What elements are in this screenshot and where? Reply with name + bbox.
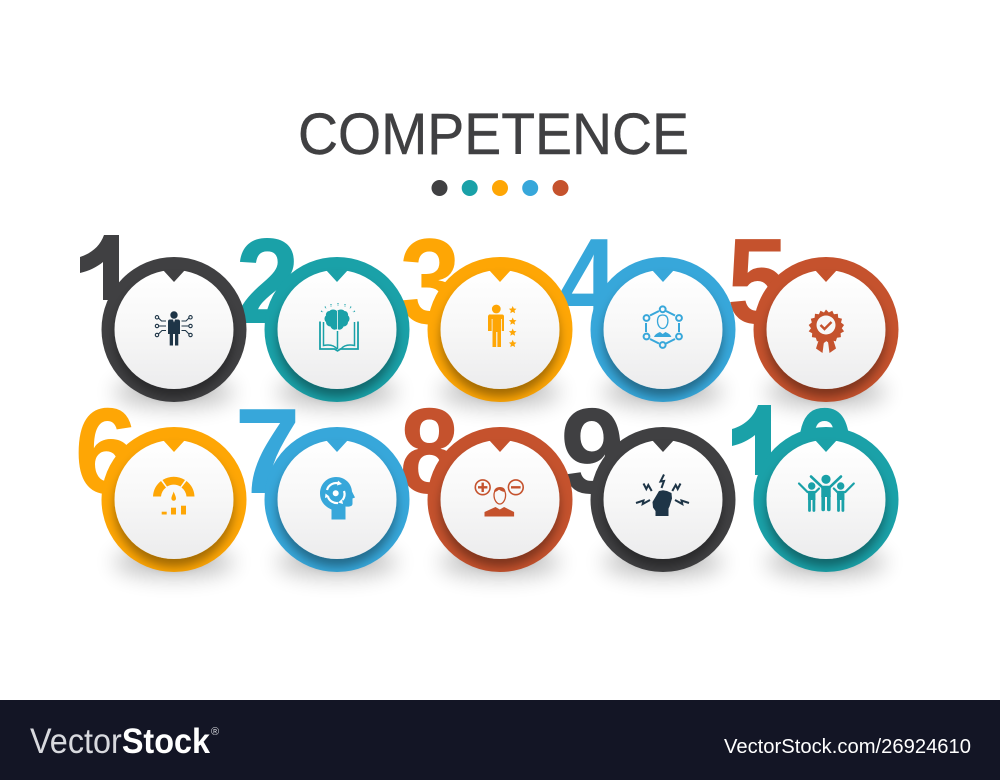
item 10: 1 [722,383,790,519]
icon: brain and book [320,303,358,351]
item 10: 0 [795,384,854,520]
item 2: 2 [235,213,300,350]
footer image id: VectorStock.com/26924610 [724,736,971,758]
item 5 [727,213,898,407]
item 9: 9 [560,383,625,520]
item 10 [732,405,898,588]
footer logo: VectorStock [30,722,210,761]
item 8 [400,384,572,577]
item 2 [235,213,410,407]
icon: award badge [809,310,844,353]
item 3 [399,213,572,407]
item 4 [558,214,736,407]
icon: gauge with bars [153,477,194,514]
title colour dots [432,180,568,196]
item 6: 6 [74,382,138,519]
item 8: 8 [400,384,459,520]
item 5: 5 [727,213,788,349]
registered mark: ® [211,726,219,738]
icon: connected person [644,306,682,348]
item 6 [74,382,246,577]
item 3: 3 [399,213,461,349]
icon: person with plus and minus [475,480,523,516]
item 4: 4 [558,214,618,350]
icon: businessman with circuit lines [155,311,192,346]
footer bar [0,700,1000,780]
icon: raised fist with lightning [636,474,689,516]
title: COMPETENCE [298,102,689,167]
item 1 [80,235,246,418]
icon: group of three people [799,475,854,510]
item 9 [560,383,736,577]
icon: person with stars [488,305,516,347]
item 7 [235,383,410,577]
icon: head with rotating arrows [320,477,355,520]
item 1: 1 [70,213,138,349]
item 7: 7 [235,383,300,519]
